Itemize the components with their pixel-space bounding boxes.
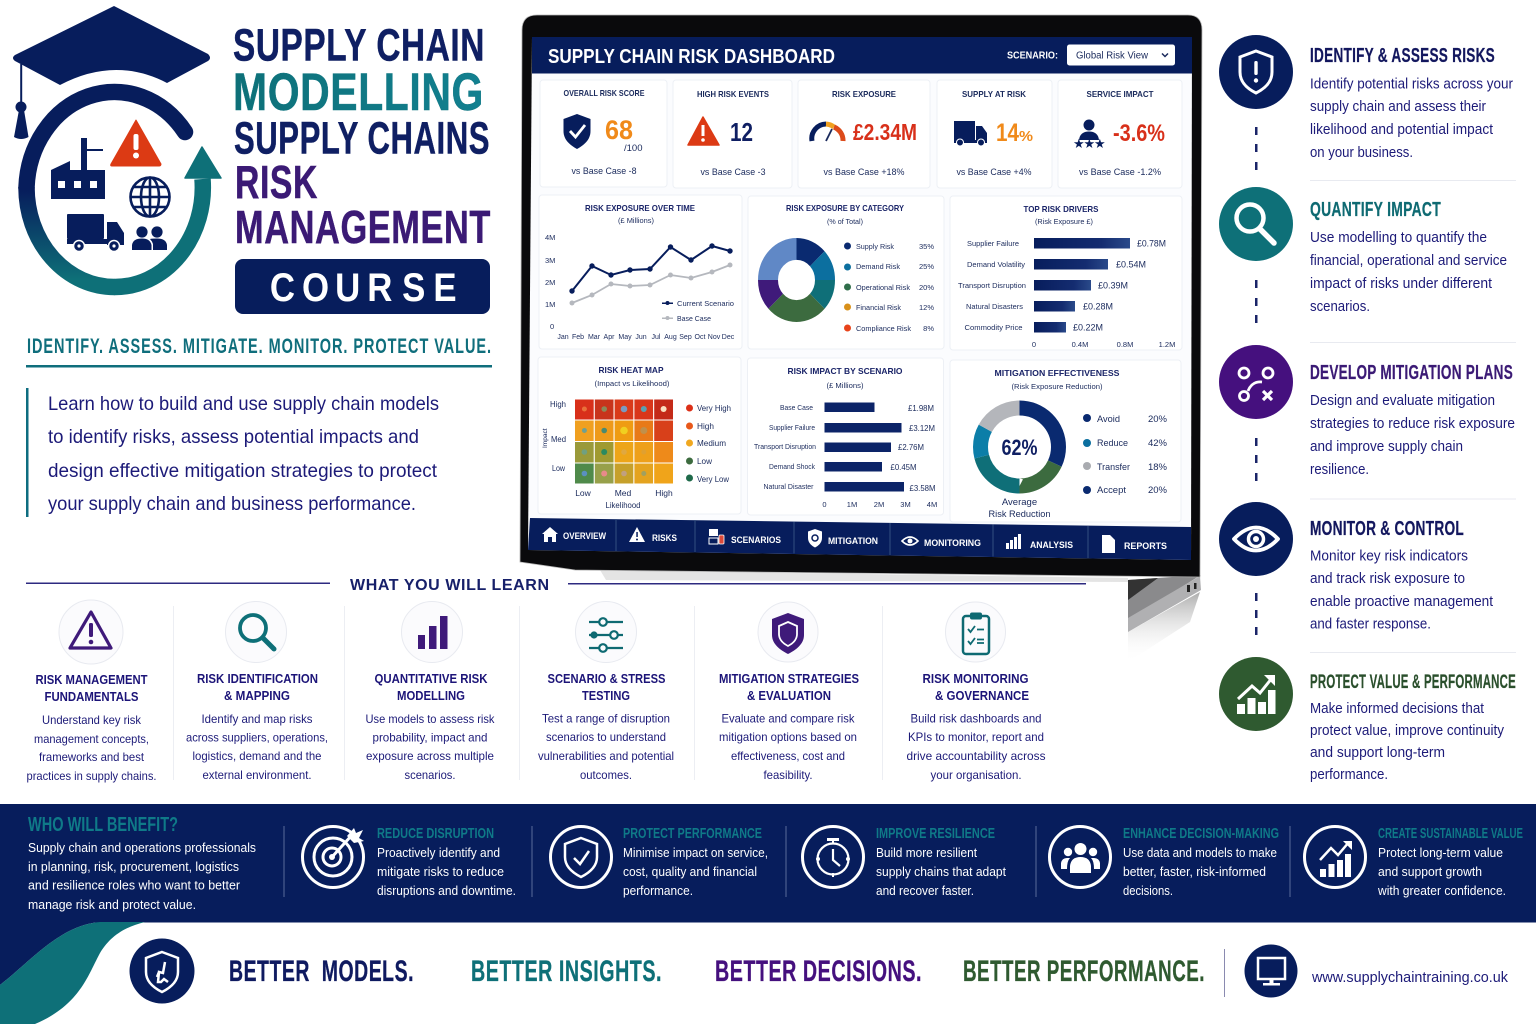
card: mitigation strategies and evaluation (694, 602, 859, 782)
KPI card: service impact (1058, 80, 1182, 188)
chart: top risk drivers: Supplier Failure (967, 239, 1019, 248)
chart: mitigation effectiveness: 42% (1148, 438, 1168, 449)
chart: top risk drivers: 1.2M (1159, 340, 1175, 349)
panel: who will benefit band (0, 804, 1536, 922)
card: risk identification and mapping: across suppliers, operations, (186, 730, 328, 744)
footer swoosh (0, 922, 145, 1024)
step: monitor and control: enable proactive management (1310, 594, 1493, 610)
footer slogans: BETTER DECISIONS. (715, 955, 922, 988)
benefit: create sustainable value: Protect long-term value (1378, 846, 1503, 860)
section heading: what you will learn: WHAT YOU WILL LEARN (350, 577, 549, 594)
benefit: improve resilience: supply chains that adapt (876, 865, 1006, 879)
card: risk identification and mapping: & MAPPING (224, 689, 290, 703)
chart: risk impact by scenario: Transport Disruption (754, 442, 816, 451)
dashboard navigation bar: SCENARIOS (731, 535, 781, 546)
chart: top risk drivers: £0.54M (1116, 260, 1146, 270)
step: develop mitigation plans: Design and evaluate mitigation (1310, 393, 1495, 409)
chart: risk heat map: High (655, 488, 673, 498)
chart: risk exposure over time: May (618, 334, 632, 341)
benefit: enhance decision-making: ENHANCE DECISION-MAKING (1123, 825, 1279, 842)
intro paragraph: design effective mitigation strategies to protect (48, 460, 438, 482)
step: develop mitigation plans: resilience. (1310, 462, 1369, 478)
chart: top risk drivers: £0.28M (1083, 302, 1113, 312)
chart: risk impact by scenario: (£ Millions) (826, 381, 864, 390)
KPI card: risk exposure (798, 80, 930, 188)
step: quantify impact: impact of risks under different (1310, 276, 1492, 292)
step: develop mitigation plans: and improve supply chain (1310, 439, 1463, 455)
title: SUPPLY CHAINS (234, 112, 490, 164)
step: identify and assess risks: supply chain and assess their (1310, 99, 1486, 115)
chart: top risk drivers: £0.22M (1073, 322, 1103, 332)
benefit: enhance decision-making (1050, 825, 1279, 898)
card: risk management fundamentals: practices in supply chains. (26, 769, 156, 783)
chart: risk exposure over time: Oct (695, 334, 705, 341)
chart: risk heat map: Med (551, 434, 566, 444)
chart: risk impact by scenario: £0.45M (890, 463, 917, 472)
course badge (235, 259, 490, 314)
chart: top risk drivers: Natural Disasters (966, 302, 1023, 311)
chart: risk exposure over time: Jun (635, 334, 647, 341)
footer shield icon (130, 938, 194, 1004)
benefit: protect performance: Minimise impact on service, (623, 846, 768, 860)
title: RISK (235, 156, 318, 208)
chart: top risk drivers: 0 (1032, 340, 1036, 349)
chart: risk exposure over time: Aug (664, 334, 677, 341)
icon: truck (67, 214, 124, 252)
dashboard navigation bar: REPORTS (1124, 541, 1167, 552)
dashboard navigation bar: MITIGATION (828, 536, 878, 547)
KPI card: service impact: ★ (1084, 136, 1095, 151)
footer slogans: BETTER PERFORMANCE. (963, 955, 1205, 988)
card: risk management fundamentals (26, 600, 156, 783)
card: scenario and stress testing: SCENARIO & STRESS (548, 672, 666, 686)
dashboard navigation bar: OVERVIEW (563, 531, 606, 542)
dashboard screen (528, 37, 1192, 560)
chart: risk exposure over time: Mar (588, 334, 601, 341)
icon: factory (51, 138, 105, 199)
chart: risk exposure by category: 35% (919, 242, 934, 251)
benefit: enhance decision-making: decisions. (1123, 884, 1173, 898)
chart: risk exposure by category: Financial Risk (856, 303, 901, 312)
chart: mitigation effectiveness: Avoid (1097, 414, 1120, 425)
card: scenario and stress testing: outcomes. (580, 768, 632, 782)
chart: risk heat map: Very High (697, 403, 731, 413)
step: monitor and control: and faster response. (1310, 616, 1431, 632)
chart: risk exposure over time: 4M (545, 233, 555, 242)
chart: risk heat map: (Impact vs Likelihood) (594, 379, 670, 388)
card: risk management fundamentals: RISK MANAGEMENT (36, 673, 148, 687)
card: quantitative risk modelling: QUANTITATIVE RISK (374, 672, 488, 686)
chart: top risk drivers: £0.39M (1098, 280, 1128, 290)
chart: risk impact by scenario: Natural Disaster (764, 482, 814, 491)
connector: dashed (1255, 438, 1258, 481)
chart: mitigation effectiveness: Average (1002, 497, 1037, 508)
chart: risk heat map (538, 357, 741, 514)
card: risk monitoring and governance: & GOVERNANCE (935, 689, 1029, 703)
chart: risk impact by scenario: 4M (927, 500, 937, 509)
chart: risk impact by scenario: £2.76M (898, 443, 924, 452)
benefit: enhance decision-making: better, faster, risk-informed (1123, 865, 1266, 879)
KPI card: supply at risk: 14 (996, 119, 1019, 147)
chart: risk exposure by category: Operational Risk (856, 283, 910, 292)
text block: who will benefit: and resilience roles who want to better (28, 878, 241, 892)
text block: who will benefit (28, 814, 256, 912)
panel: learning cards (26, 600, 1046, 783)
text block: who will benefit: in planning, risk, procurement, logistics (28, 859, 239, 874)
chart: top risk drivers: TOP RISK DRIVERS (1024, 204, 1099, 214)
card: quantitative risk modelling: probability, impact and (372, 730, 488, 744)
chart: risk exposure over time: Nov (708, 334, 721, 341)
chart: risk exposure over time: 3M (545, 256, 555, 265)
chart: risk impact by scenario: 1M (847, 500, 857, 509)
card: risk identification and mapping: logistics, demand and the (192, 749, 322, 763)
intro paragraph: your supply chain and business performance. (48, 493, 416, 515)
card: mitigation strategies and evaluation: MITIGATION STRATEGIES (719, 672, 859, 686)
benefit: protect performance: cost, quality and financial (623, 865, 757, 879)
dashboard header: SUPPLY CHAIN RISK DASHBOARD (548, 46, 835, 68)
chart: risk exposure over time: Sep (679, 334, 692, 341)
chart: risk heat map: Med (615, 488, 632, 498)
chart: risk exposure over time: 1M (545, 300, 555, 309)
step: quantify impact: scenarios. (1310, 299, 1370, 315)
card: risk identification and mapping: RISK IDENTIFICATION (197, 672, 318, 686)
KPI card: high risk events: vs Base Case -3 (700, 167, 766, 177)
card: risk management fundamentals: FUNDAMENTALS (44, 690, 138, 704)
benefit: reduce disruption: REDUCE DISRUPTION (377, 825, 494, 842)
card: mitigation strategies and evaluation: Evaluate and compare risk (722, 712, 855, 726)
chart: risk exposure over time: Dec (722, 334, 735, 341)
KPI card: service impact: SERVICE IMPACT (1086, 89, 1154, 99)
chart: risk impact by scenario: RISK IMPACT BY SCENARIO (788, 366, 903, 376)
course badge: COURSE (270, 265, 457, 310)
title: MANAGEMENT (235, 201, 491, 253)
KPI card: high risk events: 12 (730, 117, 753, 147)
card: risk monitoring and governance: your organisation. (930, 768, 1022, 782)
text block: who will benefit: manage risk and protect value. (28, 897, 196, 912)
card: risk monitoring and governance: drive accountability across (906, 749, 1046, 763)
chart: risk impact by scenario: Base Case (780, 403, 813, 412)
chart: risk exposure over time: Apr (604, 334, 615, 341)
icon: people (132, 226, 167, 250)
step: protect value and performance (1219, 657, 1516, 783)
chart: risk exposure by category: 8% (923, 324, 934, 333)
KPI card: risk exposure: RISK EXPOSURE (832, 89, 896, 99)
step: identify and assess risks: likelihood and potential impact (1310, 122, 1493, 138)
benefit: create sustainable value (1304, 825, 1523, 898)
graduation cap (13, 6, 210, 139)
chart: top risk drivers: Demand Volatility (967, 260, 1025, 269)
laptop lid bezel (520, 15, 1202, 577)
benefit: create sustainable value: and support growth (1378, 865, 1482, 879)
chart: risk exposure by category: Compliance Risk (856, 324, 911, 333)
step: identify and assess risks: Identify potential risks across your (1310, 76, 1513, 92)
step: monitor and control (1219, 502, 1493, 632)
KPI card: high risk events (673, 80, 792, 188)
card: risk monitoring and governance: Build risk dashboards and (910, 712, 1042, 726)
intro paragraph: to identify risks, assess potential impacts and (48, 426, 419, 448)
chart: risk exposure by category: 20% (919, 283, 934, 292)
KPI card: overall risk score: vs Base Case -8 (572, 166, 636, 176)
step: quantify impact: Use modelling to quantify the (1310, 230, 1487, 246)
KPI card: service impact: ★ (1094, 136, 1106, 151)
chart: risk exposure over time: Base Case (677, 314, 711, 323)
connector: dashed (1255, 280, 1258, 323)
step: monitor and control: Monitor key risk indicators (1310, 548, 1468, 564)
benefit: improve resilience: and recover faster. (876, 884, 974, 898)
card: risk identification and mapping: Identify and map risks (202, 712, 312, 726)
card: scenario and stress testing: Test a range of disruption (542, 712, 670, 726)
card: mitigation strategies and evaluation: & EVALUATION (747, 689, 831, 703)
card: mitigation strategies and evaluation: mitigation options based on (719, 730, 857, 744)
chart: risk impact by scenario: 0 (822, 500, 827, 509)
card: risk management fundamentals: frameworks and best (39, 750, 145, 764)
KPI card: overall risk score (540, 80, 667, 187)
KPI card: overall risk score: 68 (605, 115, 633, 145)
icon: warning (111, 120, 161, 166)
KPI card: risk exposure: vs Base Case +18% (824, 167, 904, 177)
icon: globe (130, 178, 170, 216)
chart: risk exposure by category: Supply Risk (856, 242, 894, 251)
step: monitor and control: and track risk exposure to (1310, 571, 1465, 587)
KPI card: overall risk score: /100 (624, 143, 642, 154)
chart: risk impact by scenario: £1.98M (908, 404, 934, 413)
chart: risk exposure over time: (£ Millions) (618, 216, 654, 225)
tagline: IDENTIFY. ASSESS. MITIGATE. MONITOR. PROTECT VALUE. (27, 334, 492, 358)
dashboard navigation bar: ANALYSIS (1030, 540, 1073, 551)
intro paragraph (26, 388, 439, 517)
KPI card: overall risk score: OVERALL RISK SCORE (564, 88, 645, 98)
KPI card: supply at risk: SUPPLY AT RISK (962, 89, 1027, 99)
chart: risk heat map: Low (552, 463, 566, 473)
chart: top risk drivers: 0.8M (1117, 340, 1133, 349)
chart: top risk drivers: £0.78M (1137, 238, 1166, 248)
step: protect value and performance: protect value, improve continuity (1310, 723, 1505, 739)
step: protect value and performance: performance. (1310, 767, 1388, 783)
chart: risk heat map: RISK HEAT MAP (598, 365, 664, 375)
benefit: improve resilience: Build more resilient (876, 846, 977, 860)
step: protect value and performance: Make informed decisions that (1310, 701, 1484, 717)
benefit: protect performance (550, 825, 768, 898)
KPI card: high risk events: HIGH RISK EVENTS (697, 89, 769, 99)
chart: risk exposure over time: 2M (545, 278, 555, 287)
KPI card: risk exposure: £2.34M (853, 119, 917, 145)
chart: risk exposure over time: 0 (550, 322, 554, 331)
chart: mitigation effectiveness: 20% (1148, 485, 1168, 496)
dashboard navigation bar: RISKS (652, 533, 677, 544)
footer website link (1244, 944, 1508, 998)
text block: who will benefit: Supply chain and operations professionals (28, 840, 256, 855)
card: risk monitoring and governance: RISK MONITORING (922, 672, 1028, 686)
card: risk identification and mapping: external environment. (202, 768, 312, 782)
chart: top risk drivers: 0.4M (1072, 340, 1088, 349)
chart: risk heat map: High (697, 421, 714, 431)
benefit: reduce disruption: mitigate risks to reduce (377, 865, 504, 879)
step: develop mitigation plans: strategies to reduce risk exposure (1310, 416, 1515, 432)
footer slogans: BETTER INSIGHTS. (471, 955, 662, 988)
chart: risk heat map: Very Low (697, 474, 730, 484)
benefit: reduce disruption (302, 825, 516, 898)
chart: mitigation effectiveness: (Risk Exposure Reduction) (1012, 382, 1103, 391)
chart: risk heat map: Likelihood (606, 500, 641, 510)
chart: risk exposure by category: Demand Risk (856, 262, 900, 271)
card: scenario and stress testing: scenarios to understand (546, 730, 666, 744)
chart: risk exposure by category: 12% (919, 303, 934, 312)
dashboard header: SCENARIO: (1007, 50, 1058, 62)
laptop (520, 15, 1202, 662)
chart: risk heat map: Medium (697, 438, 726, 448)
card: risk identification and mapping (173, 602, 328, 782)
card: scenario and stress testing: vulnerabilities and potential (538, 749, 674, 763)
chart: mitigation effectiveness: Risk Reduction (988, 509, 1050, 520)
chart: top risk drivers (950, 196, 1182, 350)
title (233, 20, 491, 253)
text block: who will benefit: WHO WILL BENEFIT? (28, 814, 178, 836)
chart: risk heat map: Low (575, 488, 592, 498)
connector: dashed (1255, 593, 1258, 635)
card: mitigation strategies and evaluation: effectiveness, cost and (731, 749, 845, 763)
chart: top risk drivers: Transport Disruption (958, 281, 1026, 290)
KPI card: service impact: -3.6% (1113, 120, 1165, 147)
chart: risk impact by scenario: £3.12M (909, 424, 935, 433)
step: develop mitigation plans (1219, 345, 1515, 478)
KPI card: supply at risk: % (1019, 128, 1033, 145)
step: quantify impact (1219, 187, 1507, 315)
step: monitor and control: MONITOR & CONTROL (1310, 518, 1464, 540)
chart: mitigation effectiveness: Accept (1097, 485, 1126, 496)
chart: risk impact by scenario: 2M (874, 500, 884, 509)
chart: risk exposure over time: Jan (557, 334, 569, 341)
chart: risk exposure over time: RISK EXPOSURE OVER TIME (585, 203, 695, 213)
card: quantitative risk modelling: scenarios. (404, 768, 456, 782)
chart: risk impact by scenario: £3.58M (910, 484, 936, 493)
chart: mitigation effectiveness: 18% (1148, 462, 1168, 473)
chart: risk exposure by category: (% of Total) (827, 217, 863, 226)
chart: risk exposure by category: 25% (919, 262, 934, 271)
chart: mitigation effectiveness: 20% (1148, 414, 1168, 425)
KPI card: supply at risk (937, 80, 1052, 188)
card: quantitative risk modelling: MODELLING (397, 689, 465, 703)
title: SUPPLY CHAIN (233, 20, 485, 70)
card: risk management fundamentals: management concepts, (34, 732, 149, 746)
chart: risk exposure over time: Jul (652, 334, 661, 341)
chart: risk exposure over time: Current Scenario (677, 299, 734, 308)
chart: mitigation effectiveness: Transfer (1097, 462, 1130, 473)
card: risk monitoring and governance (882, 602, 1046, 782)
chart: risk impact by scenario: Demand Shock (769, 462, 815, 471)
chart: risk heat map: Low (697, 456, 713, 466)
chart: top risk drivers: (Risk Exposure £) (1035, 217, 1093, 226)
chart: risk impact by scenario (748, 358, 944, 515)
footer website link: www.supplychaintraining.co.uk (1311, 969, 1508, 986)
chart: mitigation effectiveness (950, 360, 1181, 522)
chart: risk exposure by category: RISK EXPOSURE BY CATEGORY (786, 203, 904, 213)
chart: mitigation effectiveness: MITIGATION EFFECTIVENESS (994, 368, 1120, 378)
panel: right column steps (1219, 35, 1516, 783)
step: quantify impact: financial, operational and service (1310, 253, 1507, 269)
card: mitigation strategies and evaluation: feasibility. (764, 768, 812, 782)
step: identify and assess risks: on your business. (1310, 145, 1413, 161)
chart: risk exposure over time (539, 195, 742, 349)
card: quantitative risk modelling (344, 602, 495, 782)
benefit: reduce disruption: disruptions and downtime. (377, 884, 516, 898)
KPI card: supply at risk: vs Base Case +4% (956, 167, 1032, 177)
footer slogans: BETTER MODELS. (229, 955, 414, 988)
chart: risk impact by scenario: Supplier Failure (769, 423, 815, 432)
chart: risk heat map: High (550, 399, 566, 409)
dashboard navigation bar: MONITORING (924, 538, 981, 549)
intro paragraph: Learn how to build and use supply chain models (48, 393, 439, 415)
benefit: improve resilience (802, 825, 1006, 898)
chart: risk heat map: Impact (542, 428, 549, 448)
footer slogans (229, 955, 1205, 988)
chart: risk impact by scenario: 3M (900, 500, 911, 509)
chart: mitigation effectiveness: Reduce (1097, 438, 1128, 449)
benefit: protect performance: performance. (623, 884, 693, 898)
dashboard header (532, 37, 1192, 74)
step: protect value and performance: and support long-term (1310, 745, 1445, 761)
KPI card: service impact: vs Base Case -1.2% (1079, 167, 1161, 177)
connector: dashed (1255, 127, 1258, 170)
circular arrow ring (26, 92, 221, 287)
card: quantitative risk modelling: Use models to assess risk (366, 712, 495, 726)
laptop base (600, 570, 1201, 662)
chart: risk exposure over time: Feb (572, 334, 584, 341)
dashboard navigation bar (528, 518, 1191, 560)
benefit: reduce disruption: Proactively identify and (377, 846, 500, 860)
benefit: improve resilience: IMPROVE RESILIENCE (876, 825, 995, 842)
benefit: enhance decision-making: Use data and models to make (1123, 846, 1277, 860)
card: scenario and stress testing (519, 602, 674, 782)
card: scenario and stress testing: TESTING (582, 689, 630, 703)
title: MODELLING (233, 63, 484, 122)
chart: mitigation effectiveness: 62% (1002, 435, 1038, 460)
benefit: create sustainable value: with greater confidence. (1377, 884, 1506, 898)
benefit: protect performance: PROTECT PERFORMANCE (623, 825, 762, 842)
KPI card: service impact: ★ (1073, 136, 1085, 151)
chart: top risk drivers: Commodity Price (964, 323, 1022, 332)
logo: graduation cap and ring (13, 6, 221, 287)
card: risk management fundamentals: Understand key risk (42, 713, 142, 727)
card: quantitative risk modelling: exposure across multiple (366, 749, 494, 763)
chart: risk exposure by category (748, 196, 944, 349)
card: risk monitoring and governance: KPIs to monitor, report and (908, 730, 1044, 744)
step: identify and assess risks (1219, 35, 1513, 161)
dashboard header: Global Risk View (1076, 50, 1149, 62)
step: quantify impact: QUANTIFY IMPACT (1310, 199, 1441, 221)
